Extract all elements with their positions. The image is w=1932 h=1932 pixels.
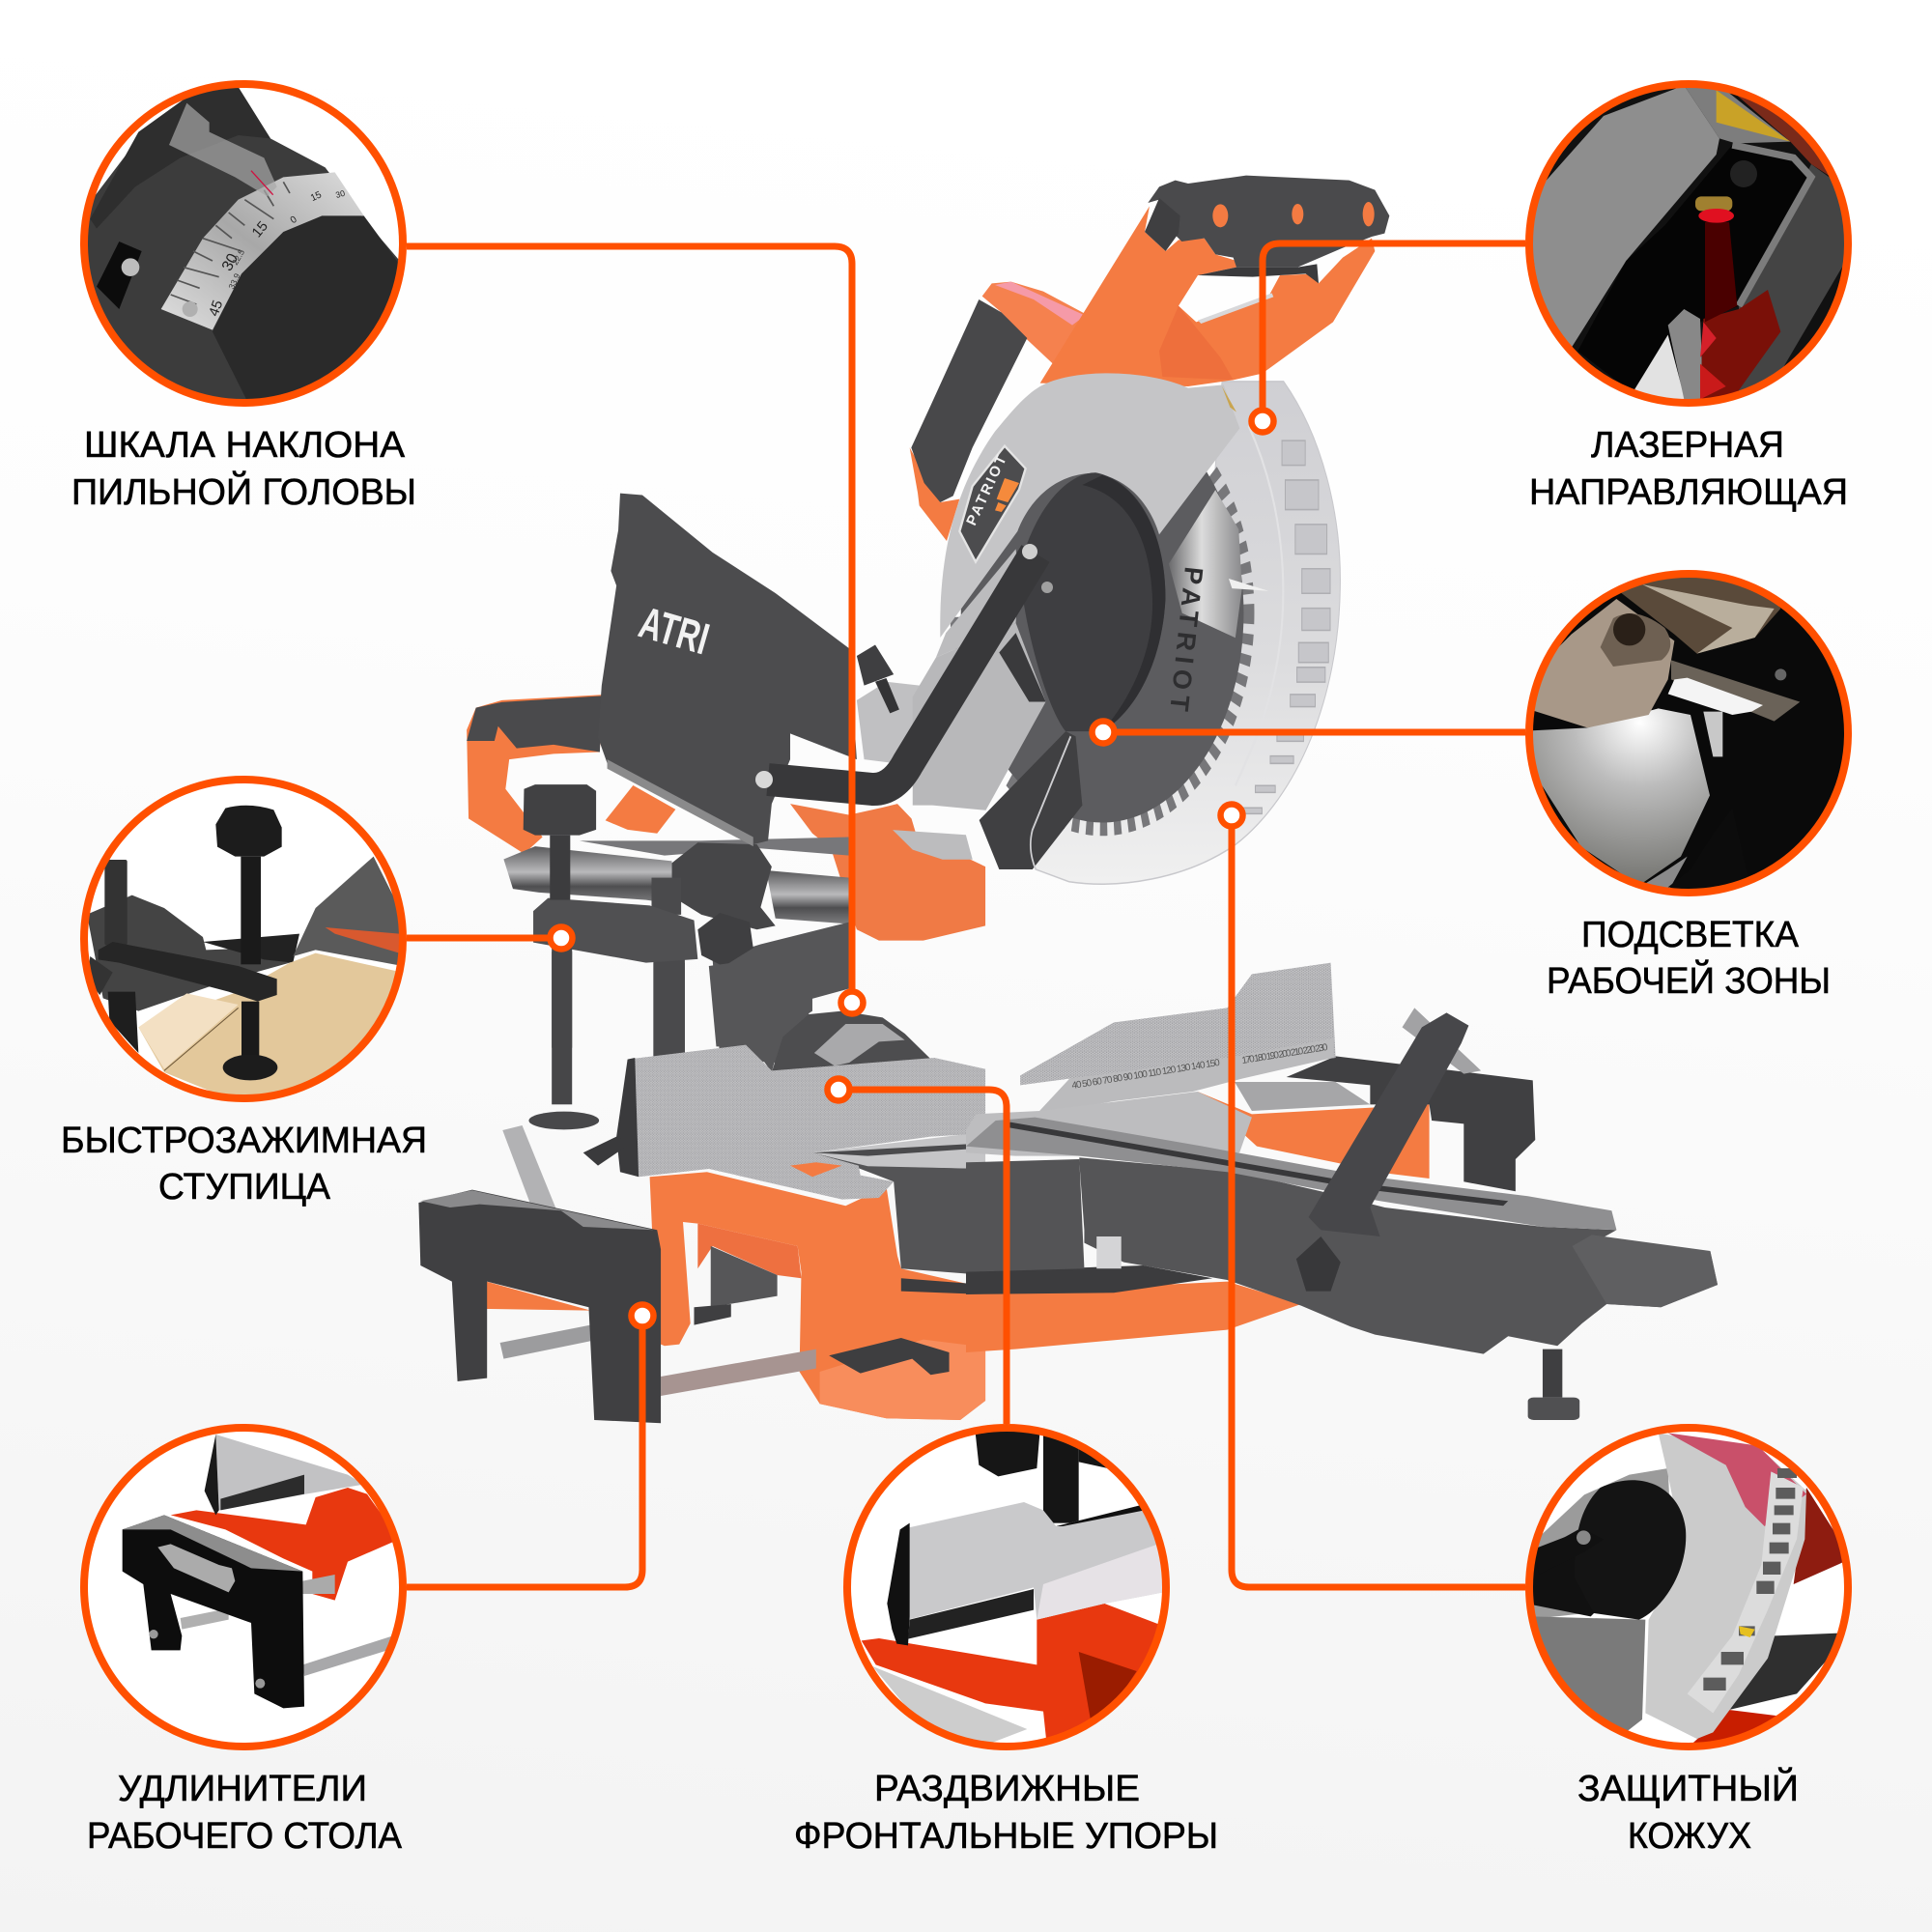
housing, clamp and posts xyxy=(524,784,849,1077)
caption: quick clamp: БЫСТРОЗАЖИМНАЯ xyxy=(61,1121,427,1161)
caption: sliding fences xyxy=(794,1769,1218,1857)
ring: tilt scale xyxy=(84,84,403,403)
panel: tilt scale xyxy=(71,77,416,513)
rear handle, bag and rails xyxy=(467,494,985,941)
photo: quick clamp xyxy=(89,806,399,1094)
photo: guard xyxy=(1533,1434,1843,1743)
caption: quick clamp: СТУПИЦА xyxy=(158,1167,331,1208)
connector end dots xyxy=(551,410,1273,1327)
caption: laser guide: ЛАЗЕРНАЯ xyxy=(1591,425,1784,466)
photo: tilt scale: 30 xyxy=(334,188,346,200)
caption: table extensions: УДЛИНИТЕЛИ xyxy=(118,1769,367,1809)
saw head rear: guards and blade xyxy=(956,382,1340,884)
connector: front fence xyxy=(838,1090,1007,1424)
caption: laser guide xyxy=(1529,425,1848,513)
dot: guard xyxy=(1221,804,1242,827)
clamp screw, extension and table base xyxy=(418,947,985,1423)
photo: tilt scale: 30 xyxy=(219,251,242,274)
connector lines xyxy=(407,243,1525,1587)
dot: table extension xyxy=(632,1304,653,1327)
blade logo: PATRIOT xyxy=(1164,565,1208,713)
photo: tilt scale: 15 xyxy=(249,218,271,241)
carriage and blade hub xyxy=(893,472,1166,869)
ring: table extensions xyxy=(84,1428,403,1747)
photo: work light xyxy=(1533,578,1844,889)
swing arm xyxy=(768,554,1036,789)
caption: tilt scale: ШКАЛА НАКЛОНА xyxy=(84,425,406,466)
photo: tilt scale xyxy=(88,88,398,399)
caption: work light: ПОДСВЕТКА xyxy=(1581,915,1800,955)
caption: guard: ЗАЩИТНЫЙ xyxy=(1577,1766,1799,1809)
panel: guard xyxy=(1521,1420,1855,1857)
ring: quick clamp xyxy=(84,780,403,1098)
ring: work light xyxy=(1529,574,1848,893)
fence ruler numbers: 40 50 60 70 80 90 100 110 120 130 140 150 xyxy=(1071,1058,1221,1092)
caption: sliding fences: ФРОНТАЛЬНЫЕ УПОРЫ xyxy=(794,1816,1218,1857)
dot: work light xyxy=(1092,721,1115,744)
panel: sliding fences xyxy=(794,1420,1218,1857)
photo: sliding fences xyxy=(851,1432,1162,1743)
dot: front fence xyxy=(827,1078,850,1101)
dot: clamp xyxy=(551,927,572,949)
connector: table extension xyxy=(407,1316,642,1587)
caption: quick clamp xyxy=(61,1121,427,1208)
caption: guard xyxy=(1577,1766,1799,1857)
arm pivot studs xyxy=(755,544,1053,788)
panel: table extensions xyxy=(77,1420,411,1857)
turntable, right fence and bevel arm xyxy=(966,963,1718,1420)
connector: clamp xyxy=(407,935,561,941)
photo: laser guide xyxy=(1533,88,1844,399)
saw head upper: handles and gray guard xyxy=(910,176,1389,638)
caption: work light: РАБОЧЕЙ ЗОНЫ xyxy=(1547,958,1831,1002)
caption: sliding fences: РАЗДВИЖНЫЕ xyxy=(874,1769,1140,1809)
photo: tilt scale: 22.5 xyxy=(230,247,246,267)
guard badge logo: PATRIOT xyxy=(963,453,1010,528)
dot: tilt scale xyxy=(840,991,864,1014)
photo: tilt scale: 45 xyxy=(207,298,226,319)
miter saw illustration xyxy=(418,176,1718,1423)
connector: tilt scale xyxy=(407,246,852,1003)
caption: tilt scale xyxy=(71,425,416,513)
caption: table extensions xyxy=(87,1769,403,1857)
ring: sliding fences xyxy=(847,1428,1166,1747)
caption: laser guide: НАПРАВЛЯЮЩАЯ xyxy=(1529,472,1848,513)
ring: laser guide xyxy=(1529,84,1848,403)
photo: table extensions xyxy=(88,1432,399,1743)
photo: tilt scale: 15 xyxy=(309,189,324,204)
connector: work light xyxy=(1103,728,1525,736)
caption: table extensions: РАБОЧЕГО СТОЛА xyxy=(87,1816,403,1857)
photo: tilt scale: 33.9 xyxy=(226,271,242,291)
panel: quick clamp xyxy=(61,773,427,1208)
dust bag logo: ATRI xyxy=(634,597,715,664)
connector: guard xyxy=(1232,815,1525,1587)
caption: guard: КОЖУХ xyxy=(1628,1816,1751,1857)
caption: work light xyxy=(1547,915,1831,1002)
dot: laser guide xyxy=(1252,410,1273,433)
connector: laser guide xyxy=(1263,243,1525,421)
panel: work light xyxy=(1521,565,1855,1002)
panel: laser guide xyxy=(1521,77,1861,513)
ring: guard xyxy=(1529,1428,1848,1747)
caption: tilt scale: ПИЛЬНОЙ ГОЛОВЫ xyxy=(71,469,416,513)
fence ruler numbers right: 170 180 190 200 210 220 230 xyxy=(1241,1042,1329,1066)
photo: tilt scale: 0 xyxy=(289,214,299,226)
